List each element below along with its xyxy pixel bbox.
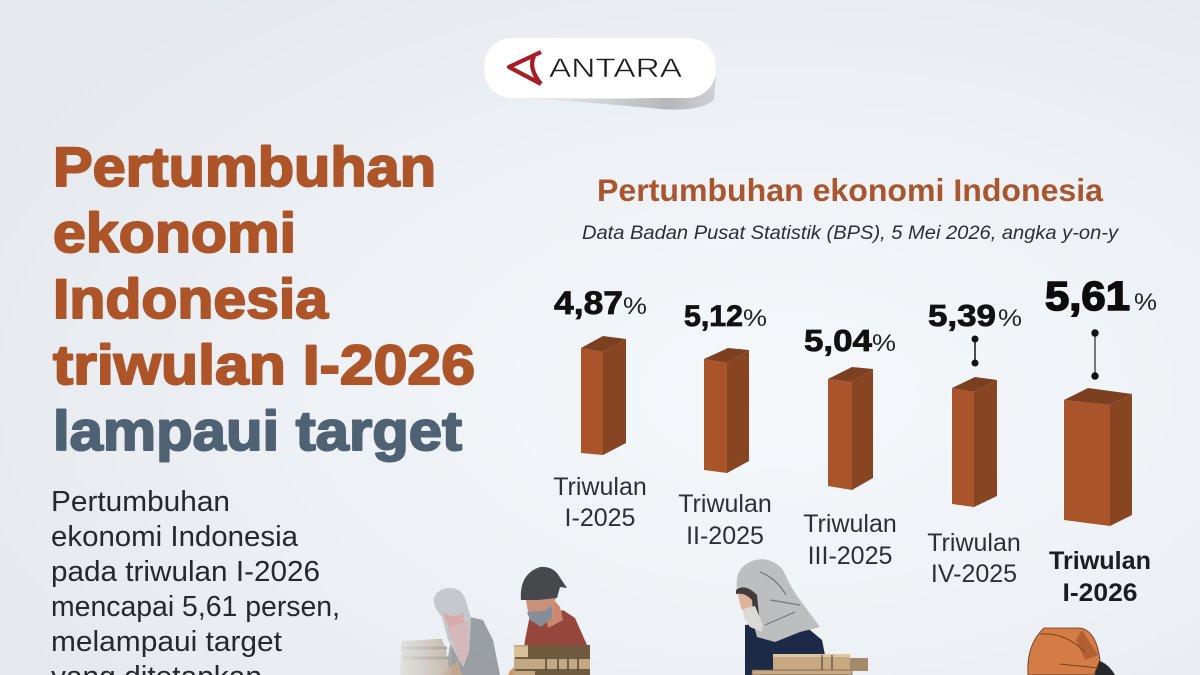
percent sign: % xyxy=(743,305,767,332)
chart heading: Pertumbuhan ekonomi Indonesia xyxy=(597,172,1103,208)
value: 5,61%: 5,61 xyxy=(1045,273,1130,319)
stray brick xyxy=(850,658,868,671)
body paragraph: Pertumbuhan xyxy=(51,486,230,518)
logo wordmark: ANTARA xyxy=(549,53,682,83)
label: Triwulan II-2025: II-2025 xyxy=(686,522,764,550)
value: 4,87%: 4,87 xyxy=(554,285,623,321)
connector: IV-2025 xyxy=(972,336,978,366)
bar: Triwulan III-2025 xyxy=(828,367,873,490)
label: Triwulan III-2025: Triwulan xyxy=(803,510,897,538)
label: Triwulan I-2025: Triwulan xyxy=(553,473,647,501)
label: Triwulan IV-2025: Triwulan xyxy=(927,529,1021,557)
body paragraph: mencapai 5,61 persen, xyxy=(51,591,340,623)
label: Triwulan IV-2025: IV-2025 xyxy=(931,560,1017,588)
bar: Triwulan I-2025 xyxy=(581,336,626,455)
title: Indonesia xyxy=(53,267,329,330)
title xyxy=(53,135,475,462)
percent sign: % xyxy=(1134,289,1157,316)
connector: I-2026 xyxy=(1091,329,1099,380)
logo badge: ANTARA xyxy=(484,38,716,110)
body paragraph xyxy=(51,486,340,675)
label: Triwulan I-2025: I-2025 xyxy=(565,504,635,532)
illustration: worker with dark cap and mask xyxy=(508,567,590,675)
title: Pertumbuhan xyxy=(53,135,436,198)
percent sign: % xyxy=(998,305,1022,332)
label: Triwulan III-2025: III-2025 xyxy=(808,542,892,570)
title: lampaui target xyxy=(53,399,462,462)
body paragraph: melampaui target xyxy=(51,626,282,658)
bar chart: quarterly growth xyxy=(553,273,1157,607)
value: 5,39%: 5,39 xyxy=(928,298,996,333)
label: Triwulan II-2025: Triwulan xyxy=(678,490,772,518)
illustration: worker with orange headscarf xyxy=(1028,628,1115,675)
percent sign: % xyxy=(623,293,647,320)
illustration: worker with grey headscarf xyxy=(736,559,868,675)
title: ekonomi xyxy=(53,201,296,264)
value: 5,04%: 5,04 xyxy=(804,323,873,358)
bar: Triwulan I-2026 xyxy=(1064,388,1132,526)
label: Triwulan I-2026: I-2026 xyxy=(1062,579,1138,607)
bar: Triwulan IV-2025 xyxy=(952,377,997,507)
body paragraph: pada triwulan I-2026 xyxy=(51,556,320,588)
percent sign: % xyxy=(872,330,896,357)
bar: Triwulan II-2025 xyxy=(704,348,749,473)
title: triwulan I-2026 xyxy=(53,333,475,396)
chart subtitle: Data Badan Pusat Statistik (BPS), 5 Mei 2026, angka y-on-y xyxy=(582,222,1119,244)
value: 5,12%: 5,12 xyxy=(684,300,743,333)
body paragraph: ekonomi Indonesia xyxy=(51,521,298,553)
icon: ANTARA logo mark xyxy=(509,52,541,84)
illustration: faded worker with bricks xyxy=(400,588,500,675)
label: Triwulan I-2026: Triwulan xyxy=(1049,547,1151,575)
